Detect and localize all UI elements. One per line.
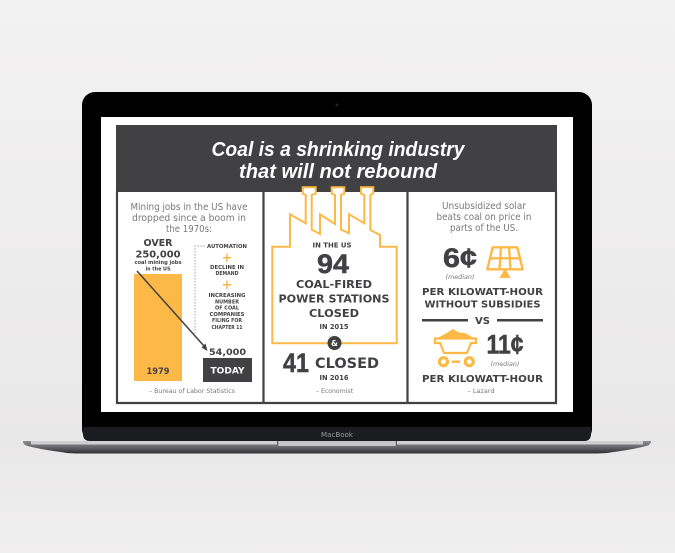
reasons list: DECLINE IN: [210, 265, 244, 271]
reasons list: AUTOMATION: [207, 244, 247, 250]
54,000: 54,000: [209, 348, 246, 358]
intro text: beats coal on price in: [436, 212, 532, 223]
laptop: [23, 92, 651, 454]
header band: [116, 125, 557, 192]
reasons list: +: [222, 278, 232, 293]
ampersand badge: [328, 336, 342, 350]
41 closed: [283, 348, 379, 382]
dotted bracket: [195, 246, 205, 335]
reasons list: [207, 244, 247, 331]
panel: mining jobs: [130, 202, 252, 395]
reasons list: COMPANIES: [210, 312, 245, 318]
vs divider: [422, 316, 543, 327]
today label: TODAY: [210, 366, 245, 376]
median label: (median): [490, 361, 520, 368]
infographic: [116, 125, 557, 403]
reasons list: CHAPTER 11: [212, 325, 243, 331]
hinge notch: [277, 441, 397, 446]
today box: [203, 358, 252, 382]
11 cents: 11¢: [486, 330, 524, 360]
factory text: COAL-FIRED: [296, 278, 372, 291]
title: [212, 138, 466, 183]
41 closed: IN 2016: [320, 374, 349, 382]
screen: [101, 117, 573, 412]
reasons list: FILING FOR: [212, 318, 242, 324]
factory text: IN 2015: [320, 323, 349, 331]
intro text: Mining jobs in the US have: [130, 202, 248, 213]
factory text: 94: [317, 249, 349, 279]
intro text: [130, 202, 248, 235]
source: – Bureau of Labor Statistics: [149, 388, 235, 395]
panel frame: [117, 191, 556, 403]
panel: solar vs coal: [422, 201, 543, 395]
over 250,000 label: coal mining jobs: [134, 260, 182, 266]
per kilowatt-hour: PER KILOWATT-HOUR: [422, 374, 543, 385]
panel: power stations: [272, 187, 397, 395]
icon: coal cart: [435, 329, 476, 366]
per kilowatt-hour without subsidies: PER KILOWATT-HOUR: [422, 287, 543, 298]
intro text: [436, 201, 532, 234]
bar 1979: [134, 274, 182, 381]
per kilowatt-hour without subsidies: WITHOUT SUBSIDIES: [424, 300, 540, 310]
vs divider: VS: [475, 316, 490, 327]
lid bottom bezel: [83, 427, 591, 441]
decline arrow: [137, 271, 208, 351]
over 250,000 label: in the US: [146, 266, 171, 272]
base top edge: [31, 441, 643, 444]
source: – Economist: [316, 388, 354, 395]
laptop base: [23, 441, 651, 454]
intro text: parts of the US.: [450, 223, 518, 234]
intro text: Unsubsidized solar: [442, 201, 526, 212]
reasons list: +: [222, 251, 232, 266]
source: – Lazard: [468, 388, 495, 395]
MacBook label: MacBook: [321, 431, 354, 439]
laptop lid: [82, 92, 592, 442]
bar label 1979: 1979: [146, 367, 170, 377]
per kilowatt-hour without subsidies: [422, 287, 543, 310]
reasons list: OF COAL: [215, 306, 240, 312]
title: Coal is a shrinking industry: [212, 138, 466, 161]
6 cents: 6¢: [443, 243, 477, 273]
factory text: [278, 242, 390, 331]
median label: (median): [446, 274, 474, 281]
factory text: IN THE US: [312, 242, 352, 250]
ampersand badge: &: [331, 339, 338, 348]
41 closed: CLOSED: [315, 356, 379, 372]
title: that will not rebound: [239, 160, 437, 183]
over 250,000 label: 250,000: [136, 250, 181, 260]
intro text: the 1970s:: [166, 224, 212, 235]
reasons list: INCREASING: [208, 293, 246, 299]
camera: [336, 104, 338, 106]
intro text: dropped since a boom in: [132, 213, 246, 224]
factory outline: [272, 187, 397, 343]
reasons list: NUMBER: [215, 300, 239, 306]
over 250,000 label: [134, 238, 182, 272]
factory text: CLOSED: [309, 307, 359, 320]
over 250,000 label: OVER: [144, 238, 173, 249]
41 closed: 41: [283, 348, 309, 378]
reasons list: DEMAND: [216, 271, 238, 277]
factory text: POWER STATIONS: [278, 292, 390, 306]
icon: solar panel: [487, 247, 523, 278]
